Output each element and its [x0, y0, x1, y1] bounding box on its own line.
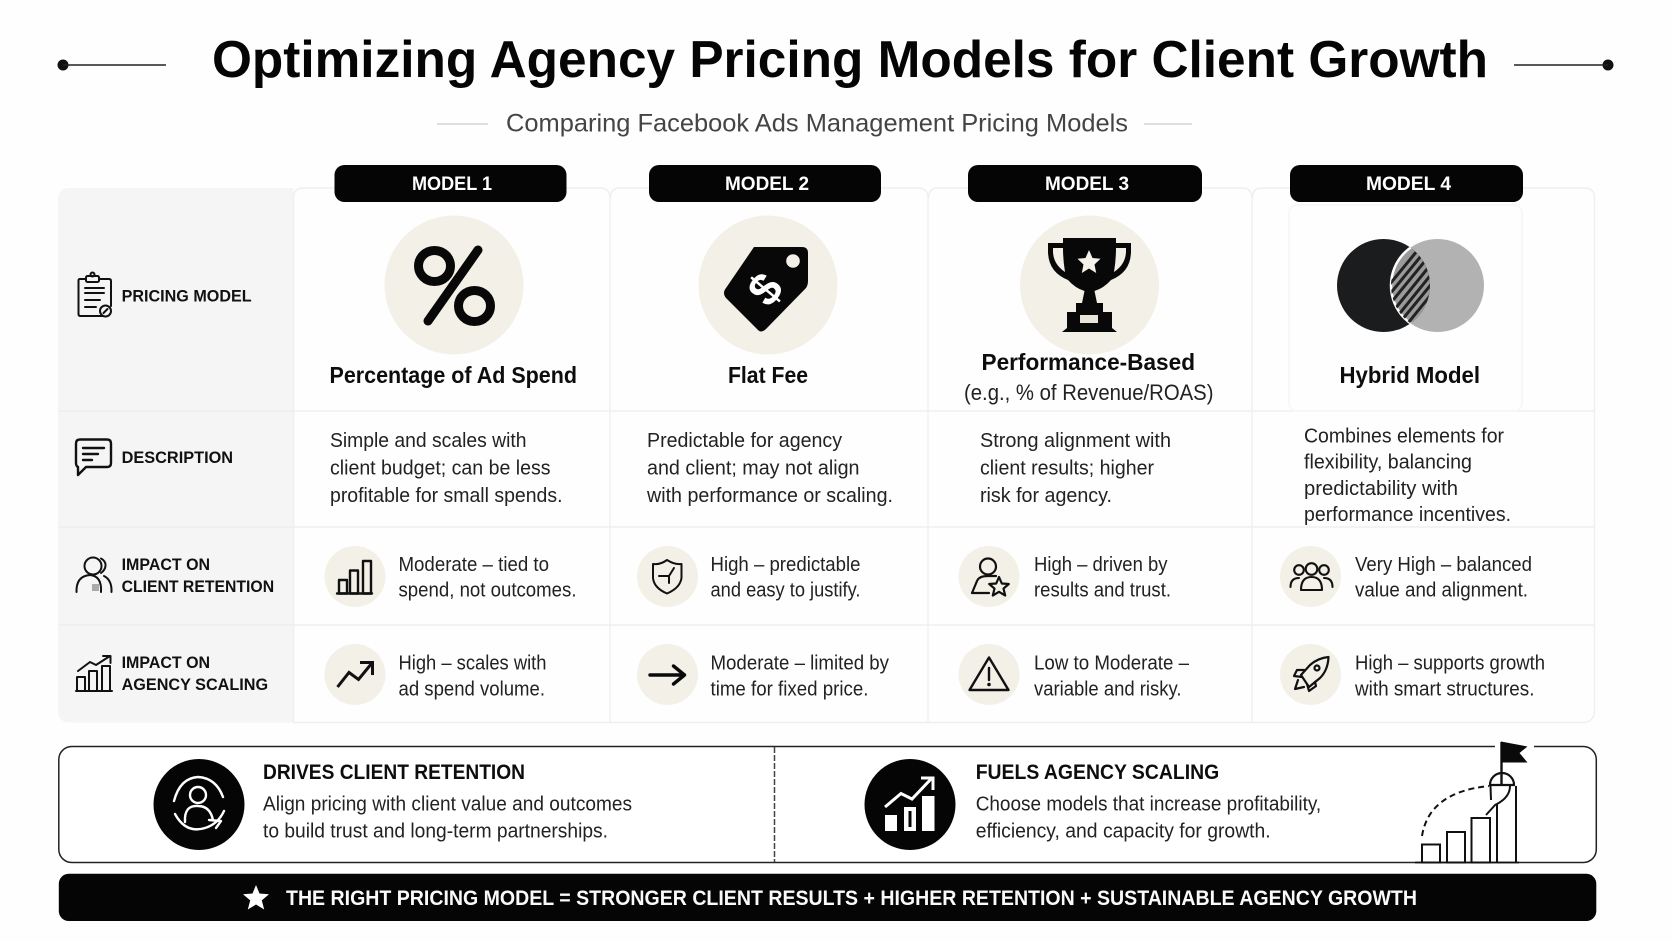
- scaling model 1: ad spend volume.: [398, 679, 545, 701]
- comparison table: [58, 165, 1594, 722]
- description: model 1: profitable for small spends.: [330, 485, 562, 507]
- retention model 3: [958, 546, 1171, 607]
- retention model 4: value and alignment.: [1355, 580, 1528, 602]
- icon: price tag: [698, 216, 838, 354]
- model 4 pill: [1290, 165, 1523, 202]
- retention model 1: spend, not outcomes.: [398, 580, 576, 602]
- retention model 1: [324, 546, 576, 607]
- model 2 pill: MODEL 2: [725, 174, 809, 195]
- scaling model 4: [1280, 644, 1545, 705]
- row label: pricing model: PRICING MODEL: [122, 286, 252, 306]
- description: model 4: predictability with: [1304, 478, 1458, 500]
- description: model 4: performance incentives.: [1304, 504, 1511, 526]
- scaling model 2: [637, 644, 889, 705]
- description: model 3: risk for agency.: [980, 485, 1112, 507]
- description: model 3: Strong alignment with: [980, 430, 1171, 452]
- row label: impact on client retention: IMPACT ON: [122, 555, 210, 574]
- column frames: [58, 188, 1594, 722]
- description: model 4: flexibility, balancing: [1304, 452, 1472, 474]
- drives client retention text: to build trust and long-term partnerships.: [263, 820, 608, 842]
- row label: description: [76, 440, 233, 475]
- model 3 pill: MODEL 3: [1045, 174, 1129, 195]
- description: model 1: Simple and scales with: [330, 430, 526, 452]
- model 2 pill: [649, 165, 881, 202]
- title: Optimizing Agency Pricing Models for Client Growth: [212, 31, 1488, 89]
- row label column background: [58, 188, 294, 722]
- model 3 pill: [968, 165, 1202, 202]
- model 3 name: (e.g., % of Revenue/ROAS): [964, 380, 1214, 405]
- retention model 3: results and trust.: [1034, 580, 1171, 602]
- icon: agency scaling: [864, 759, 956, 850]
- icon: star: [243, 885, 269, 910]
- drives client retention text: Align pricing with client value and outcomes: [263, 794, 632, 816]
- description: model 2: with performance or scaling.: [646, 485, 893, 507]
- scaling model 1: High – scales with: [398, 652, 546, 674]
- drives client retention text: [263, 761, 632, 842]
- description: model 1: client budget; can be less: [330, 458, 550, 480]
- model 1 name: Percentage of Ad Spend: [330, 362, 577, 388]
- row label: impact on client retention: [76, 555, 274, 596]
- scaling model 1: [324, 644, 546, 705]
- retention model 2: High – predictable: [710, 554, 860, 576]
- model 4 name: Hybrid Model: [1340, 362, 1480, 388]
- retention model 4: Very High – balanced: [1355, 554, 1532, 576]
- drives client retention text: DRIVES CLIENT RETENTION: [263, 761, 525, 784]
- fuels agency scaling text: [976, 761, 1321, 842]
- row label: impact on agency scaling: [76, 653, 268, 694]
- scaling model 4: with smart structures.: [1354, 679, 1534, 701]
- fuels agency scaling text: Choose models that increase profitability,: [976, 794, 1321, 816]
- icon: trophy: [1020, 216, 1159, 354]
- row label: impact on agency scaling: AGENCY SCALING: [122, 675, 268, 694]
- header ornament left: [58, 60, 166, 70]
- takeaway panel: [59, 742, 1596, 862]
- scaling model 3: Low to Moderate –: [1034, 652, 1190, 674]
- retention model 2: and easy to justify.: [710, 580, 860, 602]
- scaling model 2: Moderate – limited by: [710, 652, 889, 674]
- scaling model 2: time for fixed price.: [710, 679, 868, 701]
- fuels agency scaling text: FUELS AGENCY SCALING: [976, 761, 1219, 784]
- model 3 name: [964, 349, 1214, 405]
- hybrid highlight panel: [1289, 205, 1522, 411]
- row label: impact on agency scaling: IMPACT ON: [122, 653, 210, 672]
- retention model 2: [637, 546, 860, 607]
- description: model 2: and client; may not align: [647, 458, 860, 480]
- banner text: THE RIGHT PRICING MODEL = STRONGER CLIENT RESULTS + HIGHER RETENTION + SUSTAINABLE AGENCY GROWTH: [286, 887, 1417, 910]
- scaling model 3: [958, 644, 1190, 705]
- description: model 4: Combines elements for: [1304, 426, 1504, 448]
- description: model 4: [1304, 426, 1511, 526]
- row label: impact on client retention: CLIENT RETENTION: [122, 577, 274, 596]
- description: model 2: Predictable for agency: [647, 430, 842, 452]
- retention model 3: High – driven by: [1034, 554, 1168, 576]
- scaling model 3: variable and risky.: [1034, 679, 1182, 701]
- illustration: growth staircase with flag: [1415, 742, 1534, 862]
- description: model 1: [330, 430, 562, 507]
- row label: pricing model: [78, 272, 252, 316]
- description: model 3: client results; higher: [980, 458, 1154, 480]
- scaling model 4: High – supports growth: [1355, 652, 1545, 674]
- icon: hybrid venn: [1337, 239, 1484, 340]
- model 2 name: Flat Fee: [728, 362, 808, 388]
- subtitle: Comparing Facebook Ads Management Pricing Models: [506, 110, 1128, 138]
- icon: price tag: $: [737, 262, 793, 316]
- model 1 pill: [334, 165, 566, 202]
- bottom banner: [59, 874, 1596, 921]
- description: model 2: [646, 430, 893, 507]
- fuels agency scaling text: efficiency, and capacity for growth.: [976, 820, 1271, 842]
- header ornament right: [1514, 60, 1614, 70]
- retention model 1: Moderate – tied to: [398, 554, 549, 576]
- icon: percent: [384, 216, 524, 354]
- row label: description: DESCRIPTION: [122, 448, 233, 467]
- retention model 4: [1280, 546, 1532, 607]
- model 1 pill: MODEL 1: [412, 174, 492, 195]
- description: model 3: [980, 430, 1171, 507]
- icon: client retention: [154, 759, 244, 850]
- model 3 name: Performance-Based: [982, 349, 1195, 375]
- model 4 pill: MODEL 4: [1366, 174, 1451, 195]
